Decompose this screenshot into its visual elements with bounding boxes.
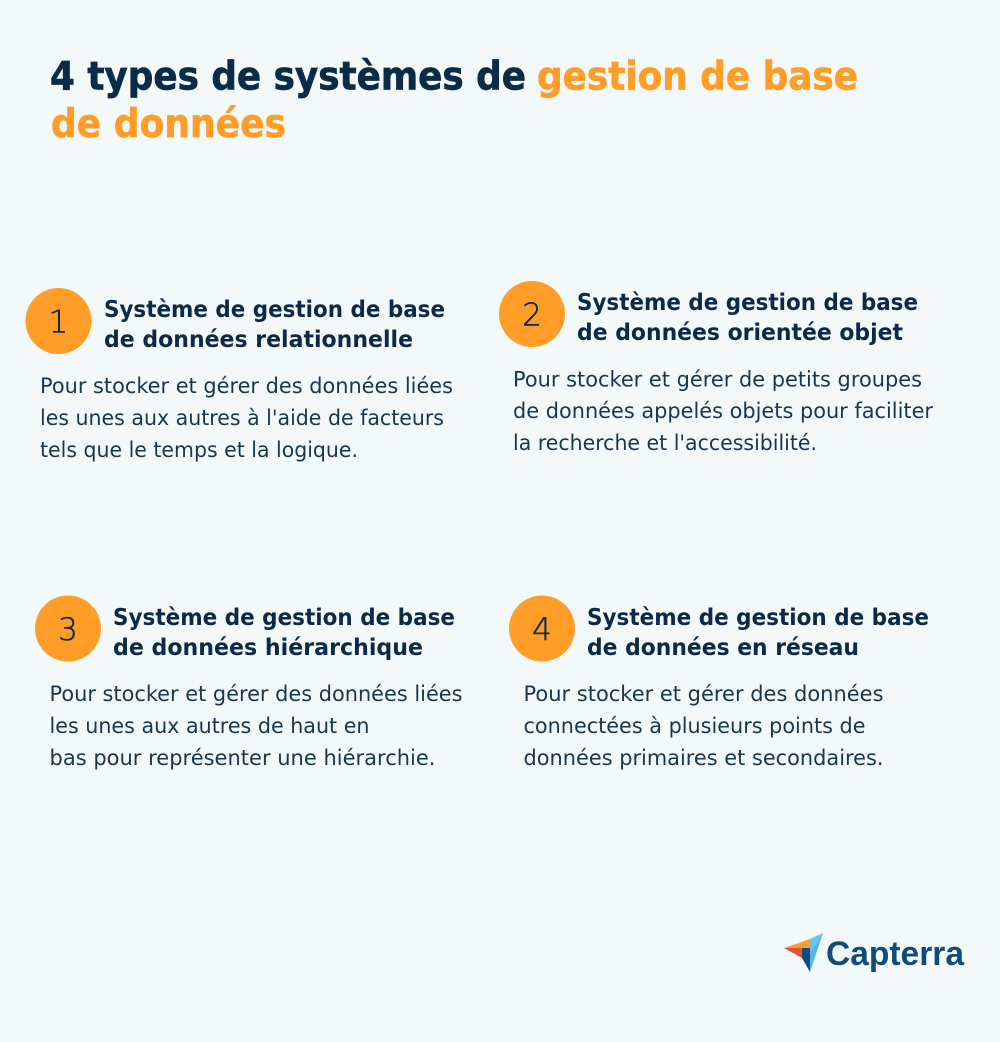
description 2 [513, 368, 933, 456]
number badge 3: 3 [58, 612, 78, 648]
number badge 2 [499, 281, 565, 347]
heading 3 [113, 605, 455, 661]
title: de données [51, 102, 286, 147]
heading 2: Système de gestion de base [577, 290, 918, 316]
description 3 [50, 682, 462, 771]
title: 4 types de systèmes de [50, 54, 526, 100]
wordmark: Capterra [826, 935, 965, 973]
panel: système 3 hiérarchique [35, 596, 462, 771]
panel: système 1 relationnelle [26, 288, 453, 463]
heading 1 [104, 297, 445, 353]
description 2: la recherche et l'accessibilité. [513, 431, 817, 456]
icon: Capterra arrow [784, 933, 823, 972]
heading 2 [577, 290, 918, 346]
heading 2: de données orientée objet [577, 320, 903, 346]
heading 1: de données relationnelle [104, 327, 413, 353]
panel: système 2 orientée objet [499, 281, 933, 456]
number badge 4 [509, 596, 575, 662]
description 3: les unes aux autres de haut en [50, 714, 370, 739]
description 4: connectées à plusieurs points de [524, 714, 866, 739]
description 3: Pour stocker et gérer des données liées [50, 682, 462, 707]
description 4: Pour stocker et gérer des données [524, 682, 884, 707]
title [50, 54, 858, 147]
description 2: Pour stocker et gérer de petits groupes [513, 368, 922, 392]
title: gestion de base [537, 54, 858, 100]
heading 3: de données hiérarchique [113, 635, 423, 661]
number badge 3 [35, 596, 101, 662]
description 3: bas pour représenter une hiérarchie. [50, 746, 436, 771]
description 1: Pour stocker et gérer des données liées [40, 374, 453, 399]
description 1: les unes aux autres à l'aide de facteurs [40, 406, 444, 431]
heading 1: Système de gestion de base [104, 297, 445, 323]
heading 4: Système de gestion de base [587, 605, 929, 631]
heading 4: de données en réseau [587, 635, 859, 661]
description 4: données primaires et secondaires. [524, 746, 884, 771]
description 1: tels que le temps et la logique. [40, 438, 358, 463]
heading 4 [587, 605, 929, 661]
number badge 4: 4 [532, 612, 552, 648]
number badge 1: 1 [49, 304, 68, 340]
logo: Capterra [784, 933, 965, 973]
number badge 1 [26, 288, 92, 354]
number badge 2: 2 [522, 298, 542, 334]
panel: système 4 en réseau [509, 596, 929, 771]
description 4 [524, 682, 884, 771]
description 1 [40, 374, 453, 463]
description 2: de données appelés objets pour faciliter [513, 399, 933, 424]
heading 3: Système de gestion de base [113, 605, 455, 631]
